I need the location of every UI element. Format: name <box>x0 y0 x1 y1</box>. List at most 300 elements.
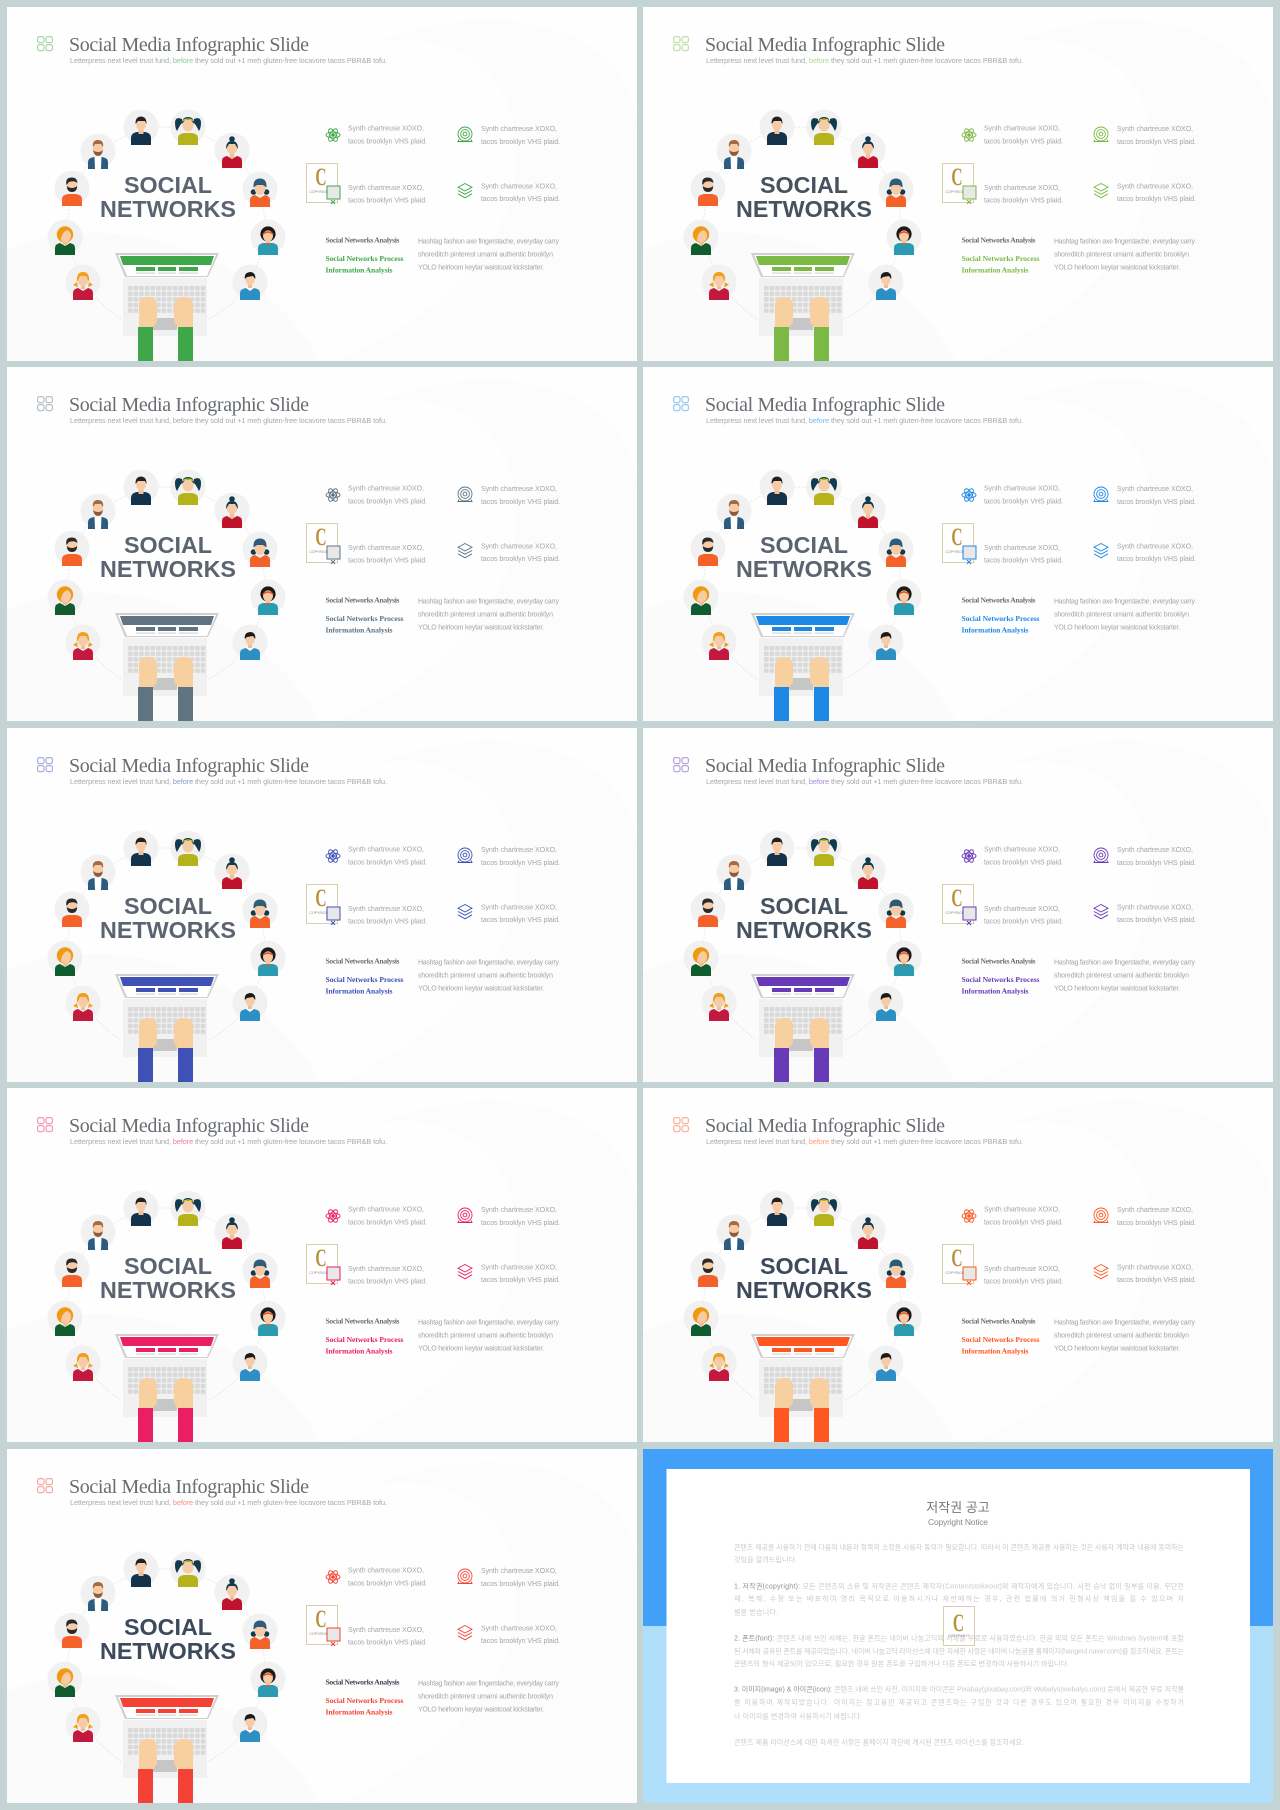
feature text 1: Synth chartreuse XOXO, <box>348 1568 424 1574</box>
placeholder badge: C <box>315 1605 327 1633</box>
avatar: bearded man <box>54 170 90 206</box>
avatar: boy blue shirt <box>232 1706 268 1742</box>
laptop and hands <box>751 974 855 1082</box>
feature text 2: Synth chartreuse XOXO, <box>1117 1207 1193 1214</box>
analysis labels: Social Networks Analysis <box>326 236 400 244</box>
panel: slide 8 orange <box>643 1088 1273 1442</box>
avatar: man in vest <box>80 854 116 890</box>
clause 3 image and icon <box>734 1684 1185 1720</box>
icon: target <box>458 1569 472 1584</box>
avatar: orange hair woman <box>48 1662 82 1697</box>
header icon <box>38 37 52 51</box>
feature text 2 <box>481 1568 560 1588</box>
icon: layers <box>458 1264 472 1279</box>
feature text 1: Synth chartreuse XOXO, <box>984 846 1060 854</box>
feature text 4 <box>1117 184 1196 203</box>
placeholder badge: C <box>315 163 327 191</box>
analysis labels: Social Networks Process <box>326 614 404 623</box>
heading: social networks <box>100 1614 236 1664</box>
avatar: man in vest <box>80 494 116 529</box>
avatar: blonde woman <box>702 264 736 300</box>
subtitle: Letterpress next level trust fund, before they sold out +1 meh gluten-free locavore tacos PBR&B tofu. <box>70 777 387 786</box>
clause 1 copyright: 벌을 받습니다. <box>734 1608 778 1616</box>
avatar: bearded man <box>690 1252 726 1287</box>
heading: social networks: NETWORKS <box>736 1277 872 1303</box>
subtitle: Letterpress next level trust fund, before they sold out +1 meh gluten-free locavore tacos PBR&B tofu. <box>70 416 387 425</box>
heading: social networks <box>100 1253 236 1303</box>
feature text 1 <box>348 846 427 866</box>
title: Social Media Infographic Slide <box>69 1476 309 1498</box>
avatar: woman bun <box>850 854 886 889</box>
title: Social Media Infographic Slide <box>69 1115 309 1137</box>
feature text 4: tacos brooklyn VHS plaid. <box>481 917 560 924</box>
icon: target <box>1094 848 1108 862</box>
feature text 3 <box>984 185 1063 204</box>
laptop and hands <box>751 253 855 361</box>
feature text 4 <box>1117 1264 1196 1284</box>
feature text 4: tacos brooklyn VHS plaid. <box>481 556 560 563</box>
feature text 1 <box>348 126 427 146</box>
avatar: blonde woman <box>702 986 736 1021</box>
header icon <box>38 397 52 411</box>
placeholder badge <box>306 1244 340 1285</box>
title: Social Media Infographic Slide <box>705 394 945 416</box>
feature text 3 <box>984 545 1063 564</box>
feature text 3: Synth chartreuse XOXO, <box>348 906 424 913</box>
icon: target <box>1094 1208 1108 1222</box>
analysis labels: Social Networks Process <box>962 975 1040 984</box>
avatar: man in vest <box>716 494 752 529</box>
analysis paragraph: YOLO heirloom keytar waistcoat kickstarter. <box>1054 624 1180 632</box>
heading: social networks: SOCIAL <box>760 532 848 558</box>
avatar: orange hair woman <box>684 1300 718 1336</box>
icon: target <box>1094 487 1108 502</box>
subtitle: Letterpress next level trust fund, before they sold out +1 meh gluten-free locavore tacos PBR&B tofu. <box>70 1137 387 1146</box>
header icon <box>38 758 52 772</box>
feature text 2 <box>1117 1207 1196 1227</box>
avatar: woman blue hair <box>878 172 914 207</box>
placeholder badge: C <box>315 523 327 551</box>
avatar: boy blue shirt <box>868 264 904 300</box>
panel: slide 4 blue <box>643 367 1273 721</box>
avatar ring <box>684 470 922 680</box>
icon: atom <box>962 487 976 503</box>
avatar ring <box>48 1552 286 1762</box>
feature text 1 <box>984 486 1063 506</box>
analysis paragraph: Hashtag fashion axe fingerstache, everyday carry <box>418 598 560 606</box>
analysis paragraph: YOLO heirloom keytar waistcoat kickstarter. <box>418 624 544 632</box>
analysis labels: Information Analysis <box>326 626 393 634</box>
heading: social networks: SOCIAL <box>760 1253 848 1279</box>
avatar: boy blue shirt <box>868 986 904 1021</box>
icon: target <box>458 127 472 142</box>
avatar: bearded man <box>690 530 726 566</box>
avatar: girl pigtails <box>170 1190 206 1226</box>
panel: slide 5 indigo <box>7 728 637 1082</box>
feature text 2: Synth chartreuse XOXO, <box>481 847 557 854</box>
analysis labels: Social Networks Analysis <box>962 236 1036 244</box>
analysis paragraph: YOLO heirloom keytar waistcoat kickstarter. <box>1054 986 1180 992</box>
title: Social Media Infographic Slide <box>705 1115 945 1137</box>
placeholder badge <box>306 523 340 564</box>
feature text 2: tacos brooklyn VHS plaid. <box>481 1581 560 1588</box>
avatar: man navy <box>124 1190 158 1226</box>
placeholder badge: C <box>951 523 963 551</box>
avatar: orange hair woman <box>684 580 718 615</box>
feature text 2: tacos brooklyn VHS plaid. <box>1117 499 1196 506</box>
placeholder badge: COPYRIGHT <box>309 911 331 915</box>
avatar: girl pigtails <box>806 830 842 866</box>
feature text 3: Synth chartreuse XOXO, <box>348 1627 424 1634</box>
feature text 1: Synth chartreuse XOXO, <box>348 1206 424 1214</box>
avatar: man in vest <box>716 134 752 169</box>
avatar: man navy <box>124 110 158 145</box>
avatar: girl pigtails <box>170 110 206 145</box>
feature text 2: tacos brooklyn VHS plaid. <box>481 139 560 146</box>
clause 2 font: 2. 폰트(font): 콘텐츠 내에 쓰인 서체는, 한글 폰트는 네이버 나눔고딕의 서체를 무료로 사용하였습니다. 한글 외의 모든 폰트는 Windows System에 포함 <box>734 1634 1185 1642</box>
avatar: man navy <box>760 110 794 145</box>
heading: social networks: SOCIAL <box>760 893 848 919</box>
avatar: woman headband <box>250 1300 286 1336</box>
analysis paragraph: YOLO heirloom keytar waistcoat kickstarter. <box>418 1346 544 1352</box>
placeholder badge: COPYRIGHT <box>945 1271 967 1275</box>
clause 3 image and icon: 나 이미지를 변경하여 사용하시기 바랍니다. <box>734 1712 862 1720</box>
icon: atom <box>962 1208 976 1224</box>
header icon <box>38 1479 52 1493</box>
placeholder badge: COPYRIGHT <box>945 911 967 915</box>
icon: layers <box>1094 904 1108 919</box>
feature text 3: Synth chartreuse XOXO, <box>348 1266 424 1273</box>
avatar ring <box>684 110 922 320</box>
feature text 3: tacos brooklyn VHS plaid. <box>984 198 1063 204</box>
placeholder badge: C <box>951 884 963 912</box>
panel: copyright notice <box>643 1449 1273 1803</box>
icon: atom <box>326 487 340 503</box>
analysis paragraph: Hashtag fashion axe fingerstache, everyday carry <box>418 238 560 246</box>
avatar: woman bun <box>214 132 250 168</box>
avatar: man in vest <box>80 134 116 169</box>
analysis labels: Social Networks Process <box>326 1696 404 1705</box>
analysis paragraph: Hashtag fashion axe fingerstache, everyday carry <box>1054 598 1196 606</box>
avatar ring <box>684 1190 922 1401</box>
feature text 1 <box>984 1206 1063 1226</box>
icon: layers <box>458 544 472 558</box>
clause 2 font: 된 서체와 공유된 폰트를 제공되었습니다. 네이버 나눔고딕 라이선스에 대한 자세한 사항은 네이버 나눔글꼴 홈페이지(hangeul.naver.com)를 참조하세요. 폰트는 <box>734 1646 1185 1656</box>
analysis labels: Social Networks Analysis <box>962 596 1036 604</box>
analysis labels: Social Networks Process <box>962 1335 1040 1344</box>
analysis labels: Social Networks Analysis <box>326 956 400 966</box>
feature text 4: Synth chartreuse XOXO, <box>481 904 557 912</box>
placeholder badge: COPYRIGHT <box>309 190 331 194</box>
analysis paragraph: shoreditch pinterest umami authentic brooklyn <box>1054 612 1189 618</box>
clause 2 font: 콘텐츠의 형식 제공되어 있으므로, 필요한 경우 원본 폰트를 구입하거나 다른 폰트로 변경하여 사용하시기 바랍니다. <box>734 1659 1069 1668</box>
avatar: woman headband <box>250 940 286 976</box>
panel: slide 3 slate <box>7 367 637 721</box>
feature text 4: tacos brooklyn VHS plaid. <box>481 1638 560 1645</box>
icon: layers <box>458 904 472 919</box>
analysis paragraph: shoreditch pinterest umami authentic brooklyn <box>1054 972 1189 980</box>
panel: slide 2 lime <box>643 7 1273 361</box>
placeholder badge: C <box>951 1244 963 1272</box>
header icon <box>674 37 688 51</box>
heading: social networks: SOCIAL <box>760 172 848 198</box>
avatar: orange hair woman <box>48 940 82 976</box>
analysis labels <box>962 596 1040 634</box>
avatar ring <box>48 1190 286 1401</box>
feature text 3 <box>984 906 1063 926</box>
subtitle: Letterpress next level trust fund, before they sold out +1 meh gluten-free locavore tacos PBR&B tofu. <box>706 56 1023 65</box>
analysis paragraph: shoreditch pinterest umami authentic brooklyn <box>418 252 553 258</box>
heading: social networks: NETWORKS <box>736 917 872 943</box>
avatar: orange hair woman <box>684 940 718 976</box>
placeholder badge: C <box>315 884 327 912</box>
avatar: man navy <box>760 830 794 866</box>
subtitle: Letterpress next level trust fund, before they sold out +1 meh gluten-free locavore tacos PBR&B tofu. <box>706 1137 1023 1146</box>
analysis labels: Information Analysis <box>326 266 393 274</box>
feature text 3: tacos brooklyn VHS plaid. <box>984 918 1063 926</box>
heading: social networks <box>736 893 872 943</box>
feature text 4: Synth chartreuse XOXO, <box>1117 904 1193 912</box>
title: Social Media Infographic Slide <box>705 34 945 56</box>
heading: social networks: NETWORKS <box>100 1638 236 1664</box>
feature text 3: tacos brooklyn VHS plaid. <box>348 1278 427 1286</box>
feature text 3: Synth chartreuse XOXO, <box>348 185 424 192</box>
analysis paragraph: YOLO heirloom keytar waistcoat kickstarter. <box>418 264 544 272</box>
title: Social Media Infographic Slide <box>69 394 309 416</box>
placeholder badge: C <box>315 1244 327 1272</box>
feature text 4: Synth chartreuse XOXO, <box>481 1626 557 1632</box>
analysis labels: Information Analysis <box>326 1708 393 1716</box>
avatar: bearded man <box>54 1252 90 1287</box>
heading: social networks: SOCIAL <box>124 1253 212 1279</box>
placeholder badge: COPYRIGHT <box>309 1632 331 1636</box>
avatar: woman bun <box>850 1214 886 1249</box>
avatar: blonde woman <box>66 986 100 1021</box>
analysis paragraph: shoreditch pinterest umami authentic brooklyn <box>418 1332 553 1340</box>
feature text 2 <box>481 1207 560 1227</box>
placeholder badge: C <box>951 163 963 191</box>
placeholder badge: C <box>953 1609 964 1637</box>
avatar: woman headband <box>250 1662 286 1697</box>
feature text 4: tacos brooklyn VHS plaid. <box>1117 556 1196 563</box>
feature text 3: tacos brooklyn VHS plaid. <box>984 1278 1063 1286</box>
avatar: boy blue shirt <box>868 624 904 660</box>
avatar: woman blue hair <box>242 172 278 207</box>
feature text 4 <box>481 904 560 924</box>
placeholder badge <box>942 1244 976 1285</box>
heading: social networks <box>736 1253 872 1303</box>
avatar: woman bun <box>214 854 250 889</box>
header icon <box>674 1118 688 1132</box>
feature text 4: tacos brooklyn VHS plaid. <box>1117 917 1196 924</box>
feature text 1: tacos brooklyn VHS plaid. <box>348 498 427 506</box>
feature text 1: tacos brooklyn VHS plaid. <box>984 860 1063 866</box>
heading: social networks <box>736 172 872 222</box>
intro text <box>734 1542 1185 1564</box>
feature text 2: tacos brooklyn VHS plaid. <box>1117 139 1196 146</box>
avatar: woman bun <box>214 1214 250 1249</box>
avatar: orange hair woman <box>48 580 82 615</box>
avatar: blonde woman <box>702 1346 736 1381</box>
avatar: girl pigtails <box>170 470 206 505</box>
analysis paragraph: shoreditch pinterest umami authentic brooklyn <box>418 972 553 980</box>
feature text 1 <box>984 126 1063 146</box>
avatar: blonde woman <box>702 624 736 660</box>
avatar: man navy <box>760 470 794 505</box>
title: Social Media Infographic Slide <box>69 755 309 777</box>
feature text 2 <box>1117 126 1196 146</box>
analysis labels <box>326 1678 404 1716</box>
laptop and hands <box>751 613 855 721</box>
avatar: woman bun <box>214 1574 250 1610</box>
avatar: man in vest <box>716 1214 752 1250</box>
subtitle: Letterpress next level trust fund, before they sold out +1 meh gluten-free locavore tacos PBR&B tofu. <box>70 56 387 65</box>
avatar: girl pigtails <box>170 1552 206 1587</box>
feature text 3: tacos brooklyn VHS plaid. <box>348 558 427 564</box>
feature text 2 <box>481 847 560 867</box>
feature text 3: tacos brooklyn VHS plaid. <box>348 1640 427 1646</box>
heading: social networks: SOCIAL <box>124 172 212 198</box>
laptop and hands <box>115 1334 219 1442</box>
analysis labels: Information Analysis <box>962 266 1029 274</box>
feature text 4: Synth chartreuse XOXO, <box>1117 1264 1193 1272</box>
clause 2 font <box>734 1634 1185 1668</box>
avatar: orange hair woman <box>48 1300 82 1336</box>
avatar: boy blue shirt <box>232 624 268 660</box>
avatar: orange hair woman <box>48 220 82 255</box>
feature text 2: Synth chartreuse XOXO, <box>481 486 557 493</box>
heading: social networks: SOCIAL <box>124 1614 212 1640</box>
analysis paragraph <box>1054 960 1196 992</box>
heading: social networks: NETWORKS <box>736 556 872 582</box>
analysis labels <box>326 956 404 996</box>
feature text 2: Synth chartreuse XOXO, <box>1117 486 1193 493</box>
analysis labels: Social Networks Process <box>326 975 404 984</box>
icon: target <box>458 487 472 502</box>
analysis paragraph <box>418 598 560 632</box>
avatar: man navy <box>760 1190 794 1226</box>
feature text 4 <box>481 1264 560 1284</box>
feature text 2 <box>1117 486 1196 506</box>
icon: atom <box>326 848 340 864</box>
feature text 1: tacos brooklyn VHS plaid. <box>984 498 1063 506</box>
subtitle: Letterpress next level trust fund, before they sold out +1 meh gluten-free locavore tacos PBR&B tofu. <box>70 1498 387 1507</box>
feature text 4: Synth chartreuse XOXO, <box>1117 544 1193 550</box>
feature text 2: Synth chartreuse XOXO, <box>481 126 557 133</box>
analysis labels: Information Analysis <box>962 626 1029 634</box>
feature text 1 <box>984 846 1063 866</box>
icon: target <box>458 1208 472 1222</box>
avatar: man in vest <box>80 1576 116 1611</box>
feature text 2: tacos brooklyn VHS plaid. <box>481 499 560 506</box>
clause 3 image and icon: 을 이용하여 제작되었습니다. 이미지는 참고용만 제공되고 콘텐츠와는 구입한 것과 다른 경우도 있으며 필요한 경우 이미지를 수정하거 <box>734 1698 1184 1706</box>
analysis paragraph <box>418 238 560 272</box>
feature text 1: Synth chartreuse XOXO, <box>348 126 424 132</box>
icon: layers <box>458 1626 472 1640</box>
title: Social Media Infographic Slide <box>705 755 945 777</box>
heading: social networks: SOCIAL <box>124 532 212 558</box>
analysis paragraph <box>1054 1320 1196 1352</box>
header icon <box>38 1118 52 1132</box>
avatar: woman bun <box>850 492 886 528</box>
avatar: woman blue hair <box>242 1614 278 1649</box>
avatar: bearded man <box>54 530 90 566</box>
feature text 1: tacos brooklyn VHS plaid. <box>348 860 427 866</box>
heading: social networks: NETWORKS <box>100 196 236 222</box>
avatar: girl pigtails <box>806 470 842 505</box>
copyright heading: 저작권 공고 <box>926 1500 990 1515</box>
feature text 4: tacos brooklyn VHS plaid. <box>481 196 560 203</box>
avatar: woman blue hair <box>242 1252 278 1288</box>
clause 3 image and icon: 3. 이미지(image) & 아이콘(icon): 콘텐츠 내에 쓰인 사진, 이미지와 아이콘은 Pixabay(pixabay.com)와 Webalys(webalys.com) 등에서 제공한 무료 저작물 <box>734 1684 1185 1694</box>
placeholder badge <box>942 163 976 204</box>
icon: target <box>458 848 472 862</box>
avatar: woman blue hair <box>878 1252 914 1288</box>
avatar: girl pigtails <box>806 1190 842 1226</box>
feature text 2 <box>481 126 560 146</box>
feature text 4: tacos brooklyn VHS plaid. <box>481 1277 560 1284</box>
avatar: woman headband <box>886 1300 922 1336</box>
icon: atom <box>326 127 340 143</box>
feature text 2: tacos brooklyn VHS plaid. <box>481 860 560 867</box>
title: Social Media Infographic Slide <box>69 34 309 56</box>
laptop and hands <box>115 974 219 1082</box>
subtitle: Letterpress next level trust fund, before they sold out +1 meh gluten-free locavore tacos PBR&B tofu. <box>706 777 1023 786</box>
avatar: man in vest <box>716 854 752 890</box>
avatar: blonde woman <box>66 1346 100 1381</box>
panel: slide 7 pink <box>7 1088 637 1442</box>
icon: layers <box>1094 544 1108 558</box>
avatar: bearded man <box>54 892 90 927</box>
analysis labels: Information Analysis <box>326 1346 393 1356</box>
avatar: woman blue hair <box>242 532 278 567</box>
feature text 2: Synth chartreuse XOXO, <box>1117 847 1193 854</box>
feature text 3: Synth chartreuse XOXO, <box>984 906 1060 913</box>
feature text 1: Synth chartreuse XOXO, <box>348 486 424 492</box>
placeholder badge <box>942 523 976 564</box>
avatar ring <box>48 110 286 320</box>
analysis paragraph: Hashtag fashion axe fingerstache, everyday carry <box>1054 238 1196 246</box>
subtitle: Letterpress next level trust fund, before they sold out +1 meh gluten-free locavore tacos PBR&B tofu. <box>706 416 1023 425</box>
feature text 4: Synth chartreuse XOXO, <box>481 544 557 550</box>
avatar: bearded man <box>690 170 726 206</box>
panel: slide 1 green <box>7 7 637 361</box>
analysis paragraph: Hashtag fashion axe fingerstache, everyday carry <box>418 960 560 966</box>
feature text 4 <box>481 1626 560 1645</box>
analysis labels: Information Analysis <box>962 1346 1029 1356</box>
avatar: man navy <box>124 830 158 866</box>
analysis labels: Social Networks Analysis <box>326 1316 400 1326</box>
heading: social networks <box>100 893 236 943</box>
feature text 4 <box>481 184 560 203</box>
icon: layers <box>1094 1264 1108 1279</box>
feature text 3: Synth chartreuse XOXO, <box>984 1266 1060 1273</box>
analysis labels <box>326 596 404 634</box>
feature text 3: Synth chartreuse XOXO, <box>984 545 1060 552</box>
avatar ring <box>684 830 922 1041</box>
laptop and hands <box>115 253 219 361</box>
feature text 1: tacos brooklyn VHS plaid. <box>348 138 427 146</box>
placeholder badge <box>306 1605 340 1646</box>
analysis paragraph: YOLO heirloom keytar waistcoat kickstarter. <box>1054 264 1180 272</box>
feature text 3 <box>984 1266 1063 1286</box>
avatar: woman headband <box>886 940 922 976</box>
avatar: man navy <box>124 1552 158 1587</box>
analysis paragraph: Hashtag fashion axe fingerstache, everyday carry <box>1054 960 1196 966</box>
analysis paragraph: shoreditch pinterest umami authentic brooklyn <box>418 612 553 618</box>
feature text 3: Synth chartreuse XOXO, <box>348 545 424 552</box>
heading: social networks <box>100 172 236 222</box>
